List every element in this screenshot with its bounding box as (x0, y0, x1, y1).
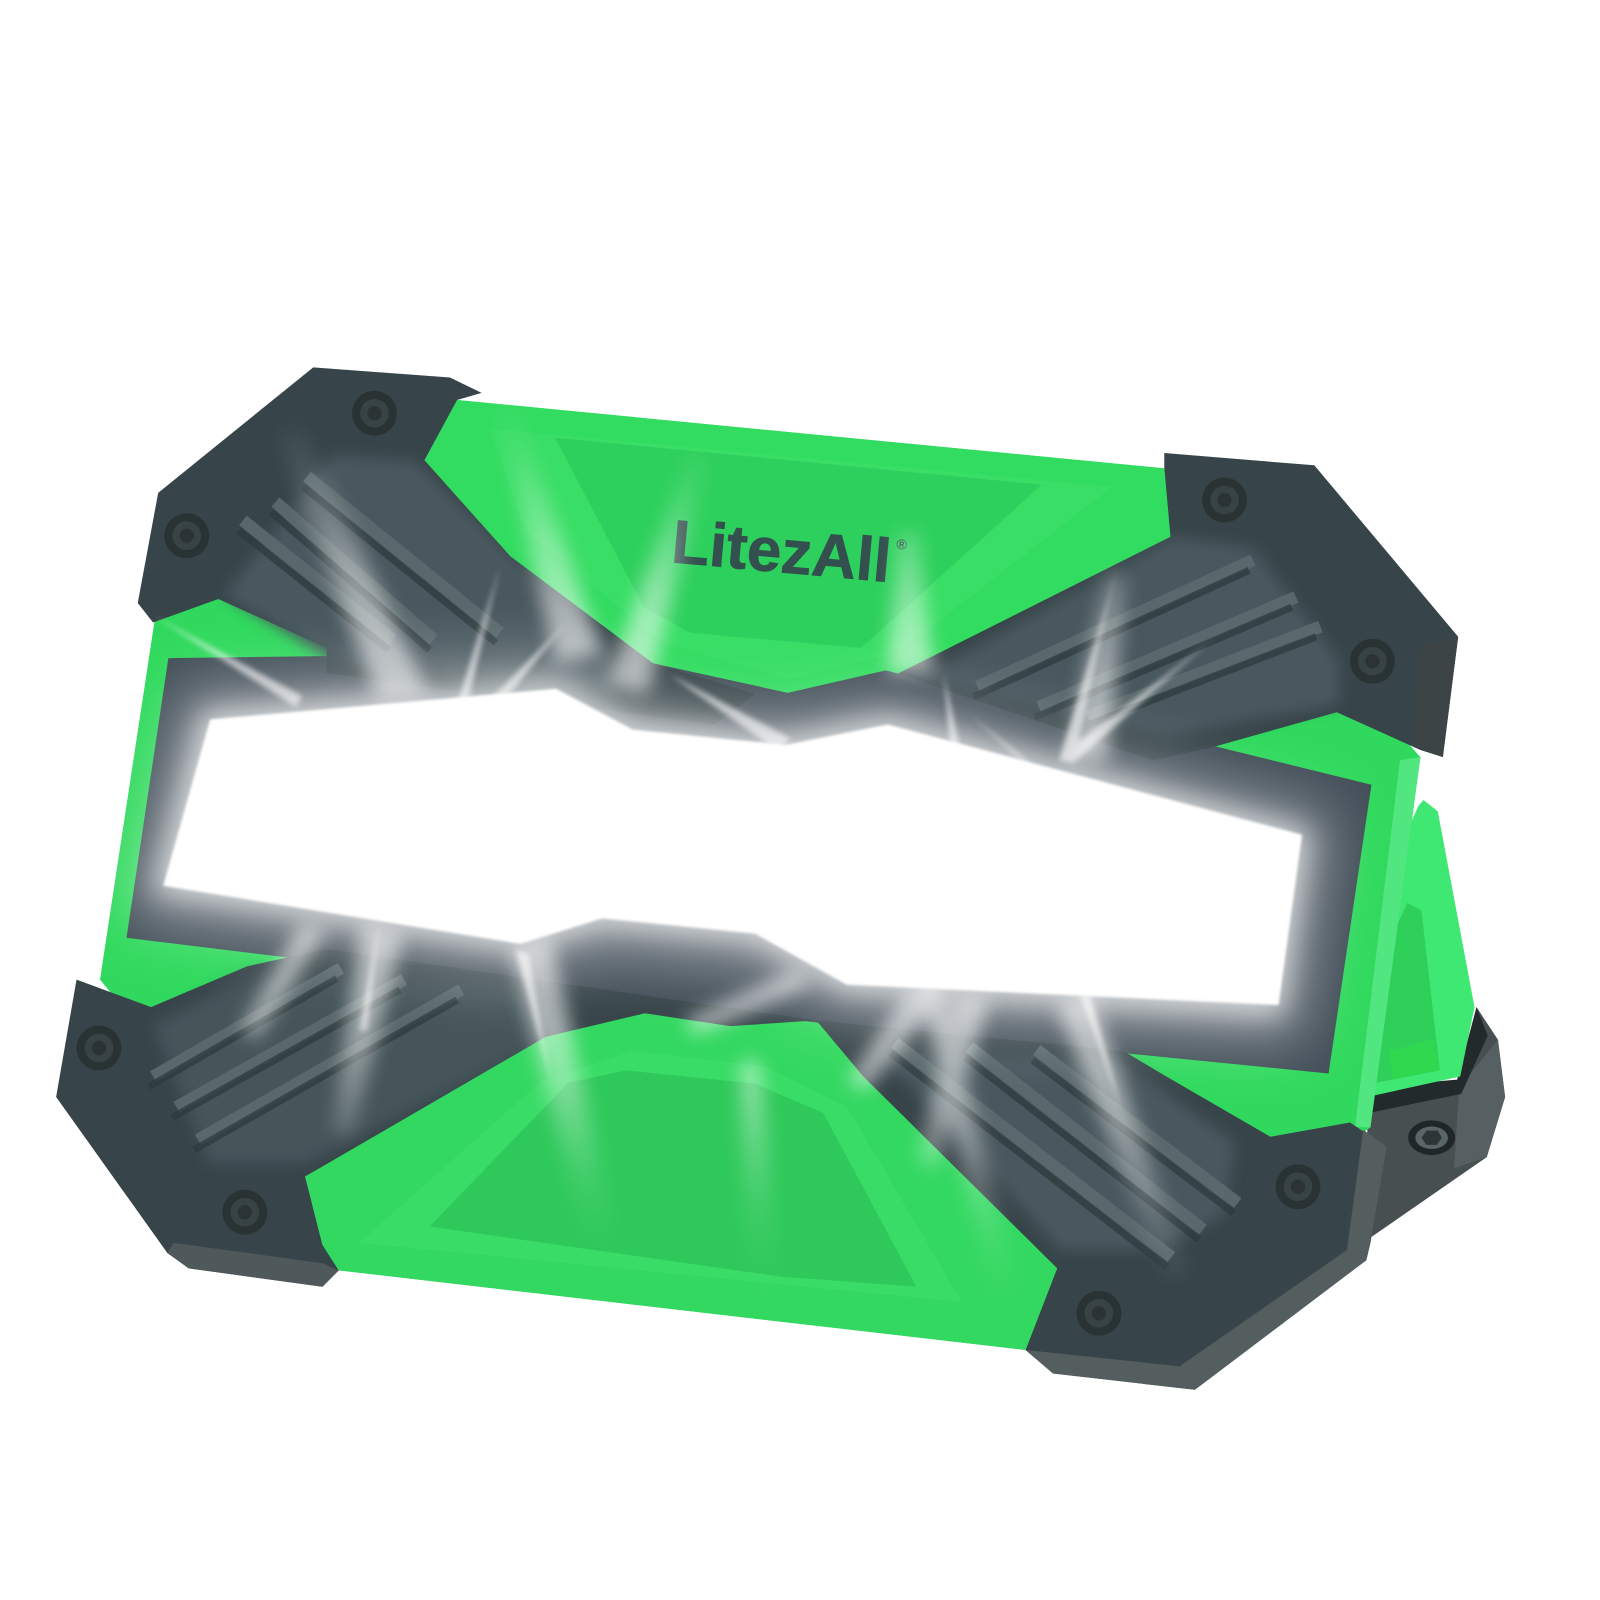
right edge highlight (1355, 757, 1420, 1128)
logo: LitezAll: LitezAll (669, 507, 894, 595)
logo: LitezAll: ® (896, 537, 908, 554)
grip ridges (149, 477, 1320, 1267)
sharp flare rays (153, 566, 1214, 1112)
bottom green panel (305, 1013, 1057, 1350)
near haze around lamp (163, 689, 1301, 1008)
glowing LED panel (163, 689, 1302, 1005)
green housing (100, 400, 1420, 1350)
screws (77, 391, 1395, 1336)
corner and arm: bottom left (56, 949, 816, 1287)
far haze around lamp (143, 673, 1316, 1026)
rear stand base (1367, 1007, 1505, 1240)
corner and arm: bottom right (816, 1020, 1387, 1390)
corner and arm: top left (138, 367, 755, 724)
rear stand leg (1367, 800, 1474, 1097)
corner and arm: top right (898, 453, 1458, 760)
dark frame around lamp (127, 653, 1371, 1073)
top green panel (424, 400, 1170, 693)
screw: rear stand (1408, 1120, 1455, 1155)
wide light haze rays (240, 398, 1189, 1306)
product illustration: LitezAll work light (56, 367, 1506, 1390)
